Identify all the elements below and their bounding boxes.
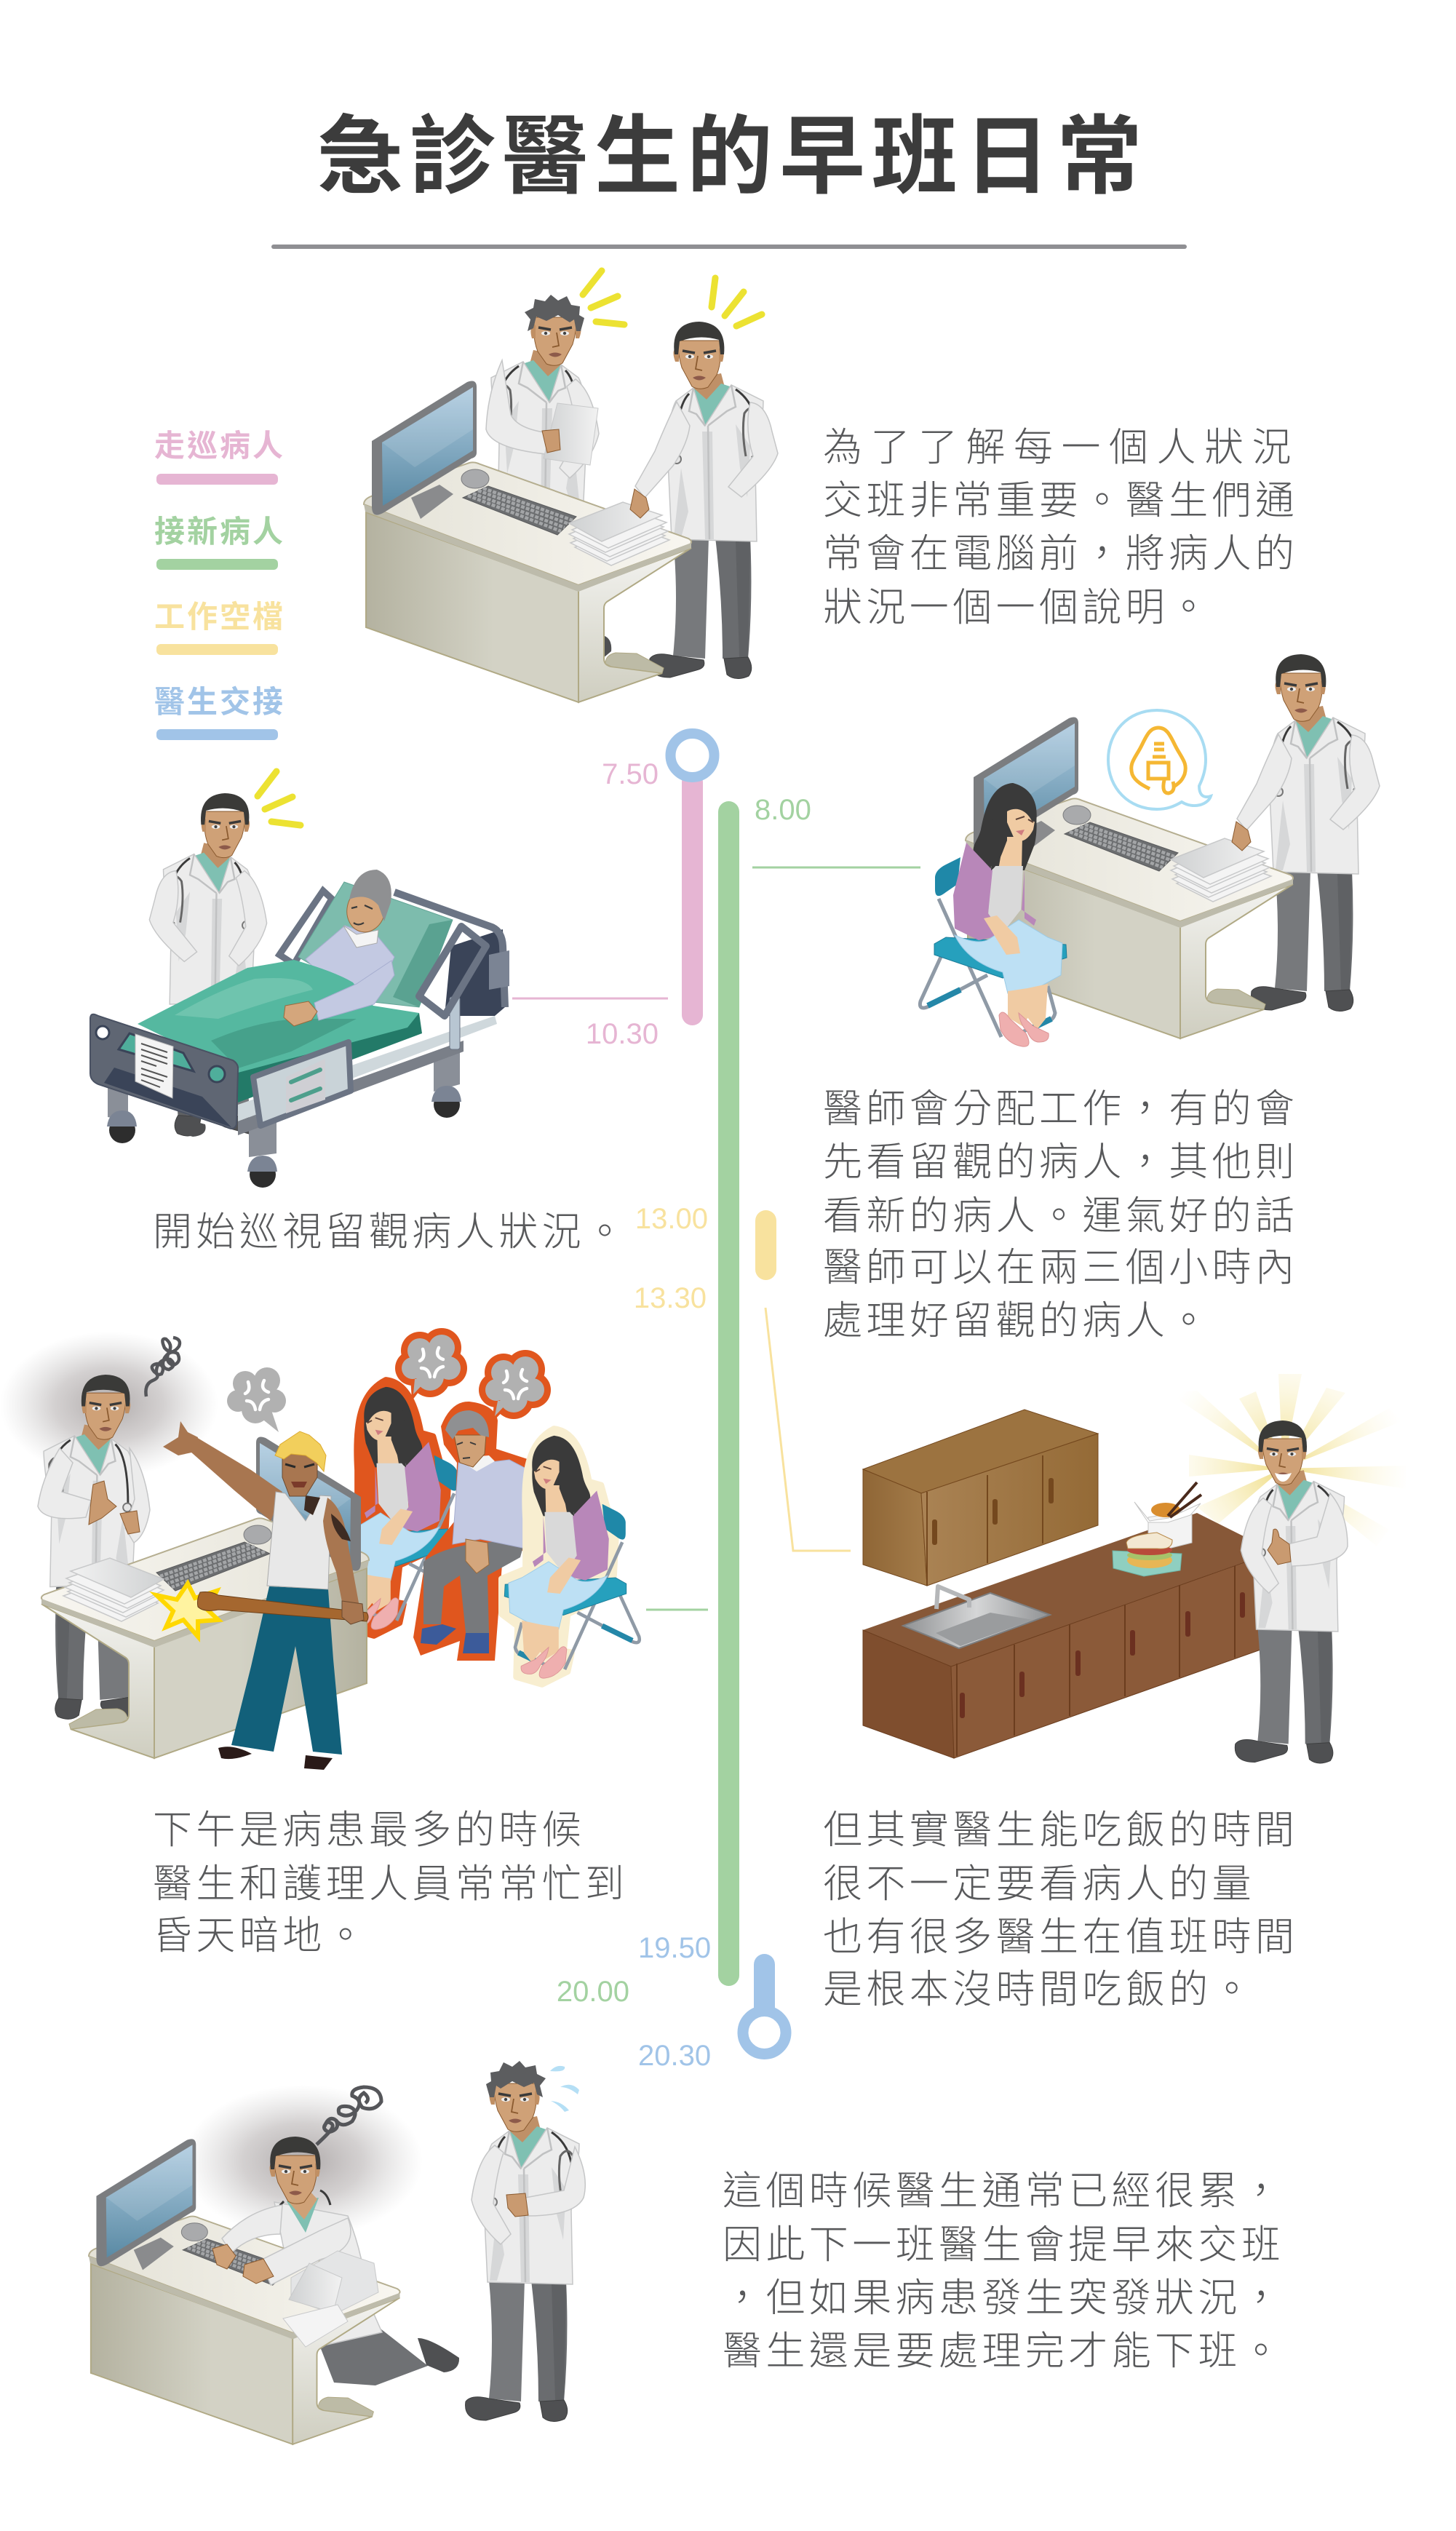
text: why handover matters: 交班非常重要。醫生們通 [823,479,1298,523]
icon: tired doctor [269,2137,382,2345]
icon: report sheet and hand [542,403,598,465]
icon: folding chair [920,857,1067,1037]
icon: older man, orange outline [413,1402,537,1661]
scene: shift handover at the desk [364,271,778,702]
icon: light rays [1168,1374,1406,1546]
timeline [512,734,920,2072]
text: no time to eat: 很不一定要看病人的量 [823,1862,1255,1906]
text: shift ends: 因此下一班醫生會提早來交班 [723,2223,1284,2267]
text: assigning work: 醫師可以在兩三個小時內 [823,1246,1298,1290]
legend item: new patients: 接新病人 [154,514,285,549]
icon: doctor arm on papers [630,402,690,518]
text: assigning work: 先看留觀的病人，其他則 [823,1140,1298,1184]
icon: angry man with bat [156,1421,368,1770]
time labels: 13.30 [634,1282,707,1314]
icon: smiling doctor thumbs up [1235,1421,1348,1763]
scene: angry patients in the afternoon [0,1328,640,1770]
icon: doctor hands in pockets [149,793,273,1136]
icon: arms on keyboard [212,2205,351,2285]
scene: exhausted doctor and relief doctor [89,2061,585,2444]
icon: scribble [146,1338,180,1396]
time labels [557,758,811,2072]
icon: grey-haired doctor holding report [486,295,611,659]
icon: gloom behind doctor [0,1332,218,1477]
scene: doctor assigning, patient waiting [920,654,1380,1046]
legend item: new patients [154,514,285,570]
blue ring: handover start [671,734,715,777]
legend item: handover: 醫生交接 [154,685,285,719]
icon: woman with chair, cream outline [502,1429,640,1684]
icon: scribble [317,2087,381,2145]
icon: doctor arm and fist [506,2147,585,2217]
icon: doctor defending [44,1375,154,1719]
icon: sweat drops [550,2066,579,2112]
text: no time to eat [823,1808,1298,2011]
text: assigning work: 醫師會分配工作，有的會 [823,1087,1298,1131]
scene: ward round at hospital bed [90,771,509,1188]
time labels: 19.50 [638,1932,711,1964]
text: assigning work [823,1087,1298,1343]
time labels: 20.30 [638,2040,711,2072]
icon: flying papers [283,2251,378,2347]
icon: doctor standing [650,322,778,679]
legend item: rounds [154,429,285,485]
icon: workstation desk mirrored [41,1437,369,1758]
icon: kneeling pants [320,2329,459,2385]
pink bar: rounds [682,771,703,1025]
text: shift ends [723,2169,1284,2373]
time labels: 20.00 [557,1976,629,2008]
time labels: 8.00 [755,794,811,826]
icon: alert ticks [583,271,762,326]
yellow bar: free time [755,1210,776,1280]
text: begin rounds: 開始巡視留觀病人狀況。 [153,1210,628,1254]
leader lines [512,867,920,1610]
icon: woman patient [953,783,1062,1046]
icon: doctor arms and raised palm [38,1448,150,1543]
icon: speech bubble with oxygen mask [1108,710,1211,809]
text: why handover matters: 常會在電腦前，將病人的 [823,532,1298,576]
text: shift ends: 醫生還是要處理完才能下班。 [723,2329,1284,2373]
text: no time to eat: 也有很多醫生在值班時間 [823,1915,1298,1959]
icon: take-out food [1113,1482,1201,1576]
title: 急診醫生的早班日常 [317,109,1149,205]
text: busiest afternoon: 昏天暗地。 [153,1914,369,1958]
icon: lower counter with sink [863,1513,1289,1758]
scene: kitchen and happy doctor [863,1374,1406,1763]
text: busiest afternoon: 下午是病患最多的時候 [153,1808,585,1852]
icon: workstation desk [89,2139,400,2444]
text: assigning work: 看新的病人。運氣好的話 [823,1194,1298,1238]
icon: man's anger cloud [227,1367,286,1432]
icon: relief doctor [466,2061,579,2422]
blue bar: handover end [743,1954,786,2054]
legend item: handover [154,685,285,740]
green bar: new patients [718,801,739,1986]
icon: upper cabinet [863,1410,1098,1586]
icon: doctor arm [1232,734,1292,851]
time labels: 7.50 [602,758,659,790]
icon: doctor [1252,654,1380,1012]
time labels: 13.00 [635,1203,708,1235]
text: why handover matters [823,426,1300,629]
icon: woman with chair, orange outline [334,1380,472,1635]
text: no time to eat: 是根本沒時間吃飯的。 [823,1968,1255,2011]
text: assigning work: 處理好留觀的病人。 [823,1299,1212,1343]
icon: hospital bed [90,870,509,1188]
legend item: free time [154,600,285,655]
legend item: free time: 工作空檔 [154,600,285,634]
icon: alert ticks [258,771,301,825]
text: busiest afternoon [153,1808,628,1958]
text: why handover matters: 狀況一個一個說明。 [823,586,1212,629]
time labels: 10.30 [586,1018,659,1050]
text: shift ends: 這個時候醫生通常已經很累， [723,2169,1284,2213]
icon: workstation desk [364,381,691,702]
text: shift ends: ，但如果病患發生突發狀況， [723,2276,1284,2320]
icon: workstation desk [966,718,1293,1038]
icon: gloom behind tired doctor [183,2085,423,2238]
text: no time to eat: 但其實醫生能吃飯的時間 [823,1808,1298,1852]
legend [154,429,285,740]
icon: anger clouds [395,1328,551,1423]
legend item: rounds: 走巡病人 [154,429,285,463]
text: why handover matters: 為了了解每一個人狀況 [823,426,1300,469]
text: busiest afternoon: 醫生和護理人員常常忙到 [153,1862,628,1906]
